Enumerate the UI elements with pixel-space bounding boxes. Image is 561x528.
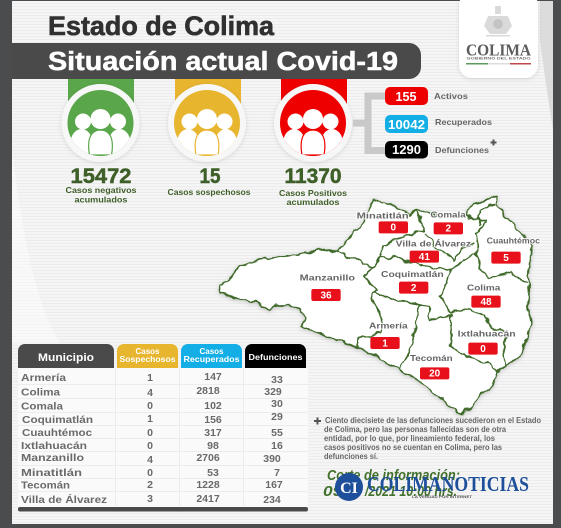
panel: suspected cases: 15	[200, 165, 221, 188]
table rows: Cuauhtémoc	[22, 427, 92, 439]
table rows: 98	[207, 440, 219, 452]
table rows: 53	[207, 467, 219, 479]
table rows: 16	[271, 440, 283, 452]
table rows: 3	[147, 493, 153, 505]
table rows: Armería	[21, 372, 66, 384]
label: Minatitlán: Minatitlán	[357, 211, 409, 221]
title: Estado de Colima	[48, 11, 274, 41]
label: Tecomán: 20	[429, 369, 441, 380]
cutoff date: 09/	[323, 484, 349, 500]
label: Minatitlán: 0	[391, 223, 397, 234]
panel: negative cases: 15472	[70, 165, 132, 188]
logo: Colima: COLIMA	[466, 40, 531, 60]
label: Minatitlán	[357, 211, 409, 234]
label: Tecomán: Tecomán	[410, 353, 453, 363]
label: Cuauhtémoc	[487, 236, 540, 264]
table rows: 102	[204, 400, 222, 412]
panel: positive cases: 11370	[284, 165, 342, 188]
label: Cuauhtémoc: Cuauhtémoc	[487, 236, 540, 246]
table rows: 390	[263, 453, 281, 465]
table rows: 1228	[196, 479, 220, 491]
table rows: 1	[147, 413, 153, 425]
connector: positive case breakdown	[353, 96, 386, 150]
table rows: Coquimatlán	[22, 414, 93, 426]
table rows: 7	[274, 467, 280, 479]
pill: recuperados	[385, 115, 492, 133]
table rows: 147	[204, 371, 222, 383]
pill: defunciones: Defunciones	[435, 145, 489, 155]
table rows: 0	[147, 427, 153, 439]
table header: Casos	[199, 347, 224, 356]
watermark: Colimanoticias	[335, 472, 529, 501]
table rows: Ixtlahuacán	[21, 440, 87, 452]
footnote: Ciento diecisiete de las defunciones sucedieron en el Estado	[325, 416, 541, 425]
label: Tecomán	[410, 353, 453, 380]
table rows: 55	[271, 427, 283, 439]
footnote: casos positivos no se cuentan en Colima, pero las	[324, 443, 503, 452]
table rows: 4	[147, 454, 153, 466]
table footer bar	[18, 507, 308, 512]
table rows: 4	[147, 387, 153, 399]
footnote: defunciones sí.	[324, 452, 378, 461]
watermark: Colimanoticias: CI	[340, 480, 358, 497]
banner: subtitle: Situación actual Covid-19	[48, 48, 398, 76]
banner: subtitle	[12, 43, 421, 79]
table rows: Villa de Álvarez	[21, 493, 107, 506]
label: Coquimatlán: Coquimatlán	[381, 269, 444, 279]
footnote: entidad, por lo que, por lineamiento federal, los	[324, 434, 496, 443]
label: Ixtlahuacán: Ixtlahuacán	[458, 328, 516, 338]
watermark: Colimanoticias: COLIMANOTICIAS	[367, 472, 529, 496]
panel: suspected cases: Casos sospechosos	[168, 187, 251, 197]
footnote	[314, 416, 541, 461]
label: Ixtlahuacán	[458, 328, 516, 355]
label: Ixtlahuacán: 0	[480, 344, 486, 355]
label: Comala	[430, 209, 466, 235]
panel: negative cases: acumulados	[74, 194, 128, 204]
label: Villa de Álvarez	[396, 238, 472, 263]
pill: recuperados: Recuperados	[435, 117, 492, 127]
table rows: 30	[271, 398, 283, 410]
watermark: Colimanoticias: LA VERDAD POR INTERNET	[412, 495, 473, 499]
pill: defunciones: 1290	[392, 142, 421, 157]
table rows: 317	[204, 427, 222, 439]
table: municipalities	[18, 344, 308, 512]
table header: Recuperados	[184, 355, 240, 364]
table rows: 234	[263, 494, 281, 506]
table rows: Tecomán	[21, 480, 70, 492]
panel: negative cases	[62, 79, 140, 204]
cutoff date: Corte de información:	[327, 468, 460, 484]
label: Manzanillo: Manzanillo	[300, 272, 355, 282]
logo: Colima: GOBIERNO DEL ESTADO	[466, 56, 531, 60]
pill: activos: 155	[396, 89, 416, 104]
map of Colima municipalities	[220, 197, 540, 415]
table rows: Minatitlán	[21, 467, 82, 479]
panel: negative cases: Casos negativos	[66, 185, 137, 195]
table rows: 167	[265, 479, 283, 491]
label: Colima: Colima	[467, 282, 501, 292]
table header	[18, 344, 306, 368]
table rows: 156	[204, 414, 222, 426]
panel: positive cases	[274, 79, 352, 207]
panel: suspected cases	[168, 79, 251, 197]
table header: Sospechosos	[120, 355, 176, 364]
label: Armería: Armería	[369, 321, 408, 331]
panel: positive cases: Casos Positivos	[279, 188, 347, 198]
icon: coat of arms	[484, 6, 512, 36]
cutoff date: /2021 10:00 hrs.	[364, 484, 457, 500]
pill: defunciones	[385, 140, 496, 158]
label: Cuauhtémoc: 5	[503, 253, 509, 264]
table rows: 329	[264, 386, 282, 398]
municipal boundaries	[337, 203, 527, 372]
table header: Defunciones	[248, 353, 303, 362]
pill: activos	[385, 87, 468, 105]
pill: activos: Activos	[434, 91, 468, 101]
label: Colima	[467, 282, 501, 308]
label: Manzanillo	[300, 272, 355, 301]
table rows: 0	[147, 467, 153, 479]
table header: Casos	[135, 347, 160, 356]
panel: positive cases: acumulados	[286, 197, 340, 207]
footnote: de Colima, pero las personas fallecidas son de otra	[324, 425, 507, 434]
table rows: 0	[147, 440, 153, 452]
label: Armería	[369, 321, 408, 349]
table rows: Colima	[21, 386, 60, 398]
table rows: 29	[271, 411, 283, 423]
table rows: 2	[147, 479, 153, 491]
label: Comala: 2	[446, 224, 452, 235]
table rows: 2818	[196, 385, 220, 397]
label: Colima: 48	[480, 297, 492, 308]
table rows: Comala	[21, 400, 63, 412]
label: Villa de Álvarez: 41	[419, 252, 430, 263]
label: Armería: 1	[382, 338, 388, 349]
table rows: 2417	[196, 493, 220, 505]
label: Comala: Comala	[430, 209, 466, 219]
logo: Colima	[459, 0, 538, 78]
table rows	[21, 371, 283, 506]
table rows: Manzanillo	[21, 452, 84, 464]
table rows: 2706	[196, 452, 220, 464]
label: Coquimatlán	[381, 269, 444, 294]
label: Manzanillo: 36	[320, 290, 332, 301]
table rows: 0	[147, 400, 153, 412]
label: Villa de Álvarez: Villa de Álvarez	[396, 238, 472, 248]
label: Coquimatlán: 2	[411, 283, 417, 294]
pill: recuperados: 10042	[388, 117, 425, 132]
table rows: 1	[147, 372, 153, 384]
cutoff date	[323, 468, 460, 500]
table header: Municipio	[38, 352, 94, 364]
table rows: 33	[271, 374, 283, 386]
